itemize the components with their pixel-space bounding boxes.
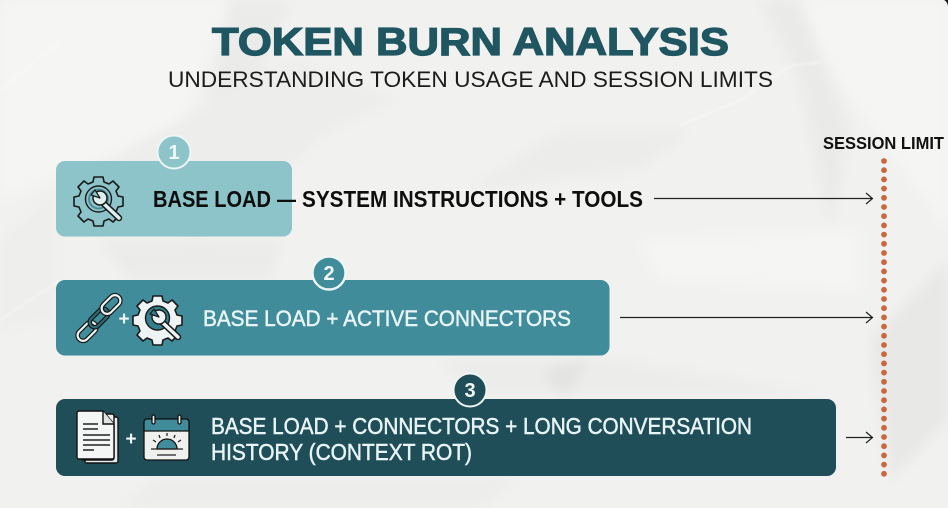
session limit label: SESSION LIMIT bbox=[823, 133, 944, 153]
icon: calendar with sunrise bbox=[144, 415, 189, 460]
arrow 1 bbox=[654, 193, 872, 204]
icon: chain bbox=[75, 293, 123, 343]
arrow 3 bbox=[846, 432, 872, 443]
panel 2: base load + connectors bbox=[56, 256, 610, 356]
badge 2: 2 bbox=[323, 263, 335, 285]
badge 3 bbox=[454, 374, 486, 406]
title: TOKEN BURN ANALYSIS bbox=[212, 21, 729, 64]
panel 3: base load + connectors + history bbox=[56, 374, 836, 476]
badge 1: 1 bbox=[168, 142, 180, 164]
session limit dotted line bbox=[881, 161, 887, 476]
subtitle: UNDERSTANDING TOKEN USAGE AND SESSION LIMITS bbox=[168, 67, 773, 92]
text: base load bbox=[153, 186, 643, 212]
text: base load: BASE LOAD bbox=[153, 186, 271, 212]
text: base load + connectors + long conversation history bbox=[211, 413, 752, 465]
icon: documents bbox=[77, 411, 118, 463]
plus sign 2: + bbox=[118, 309, 130, 330]
icon: gear and wrench bbox=[74, 177, 123, 226]
badge 3: 3 bbox=[464, 380, 476, 402]
text: base load: — bbox=[277, 186, 296, 212]
badge 2 bbox=[312, 256, 346, 290]
text: base load + active connectors: BASE LOAD + ACTIVE CONNECTORS bbox=[203, 306, 571, 331]
icon: gear and wrench white bbox=[133, 296, 182, 345]
text: base load + connectors + long conversation history: HISTORY (CONTEXT ROT) bbox=[211, 439, 472, 465]
panel 1: base load bbox=[56, 136, 643, 236]
plus sign 3: + bbox=[125, 429, 137, 450]
text: base load: SYSTEM INSTRUCTIONS + TOOLS bbox=[302, 186, 643, 212]
badge 1 bbox=[158, 136, 190, 168]
arrow 2 bbox=[620, 312, 872, 323]
text: base load + connectors + long conversation history: BASE LOAD + CONNECTORS + LONG CONVERSATION bbox=[211, 413, 752, 439]
